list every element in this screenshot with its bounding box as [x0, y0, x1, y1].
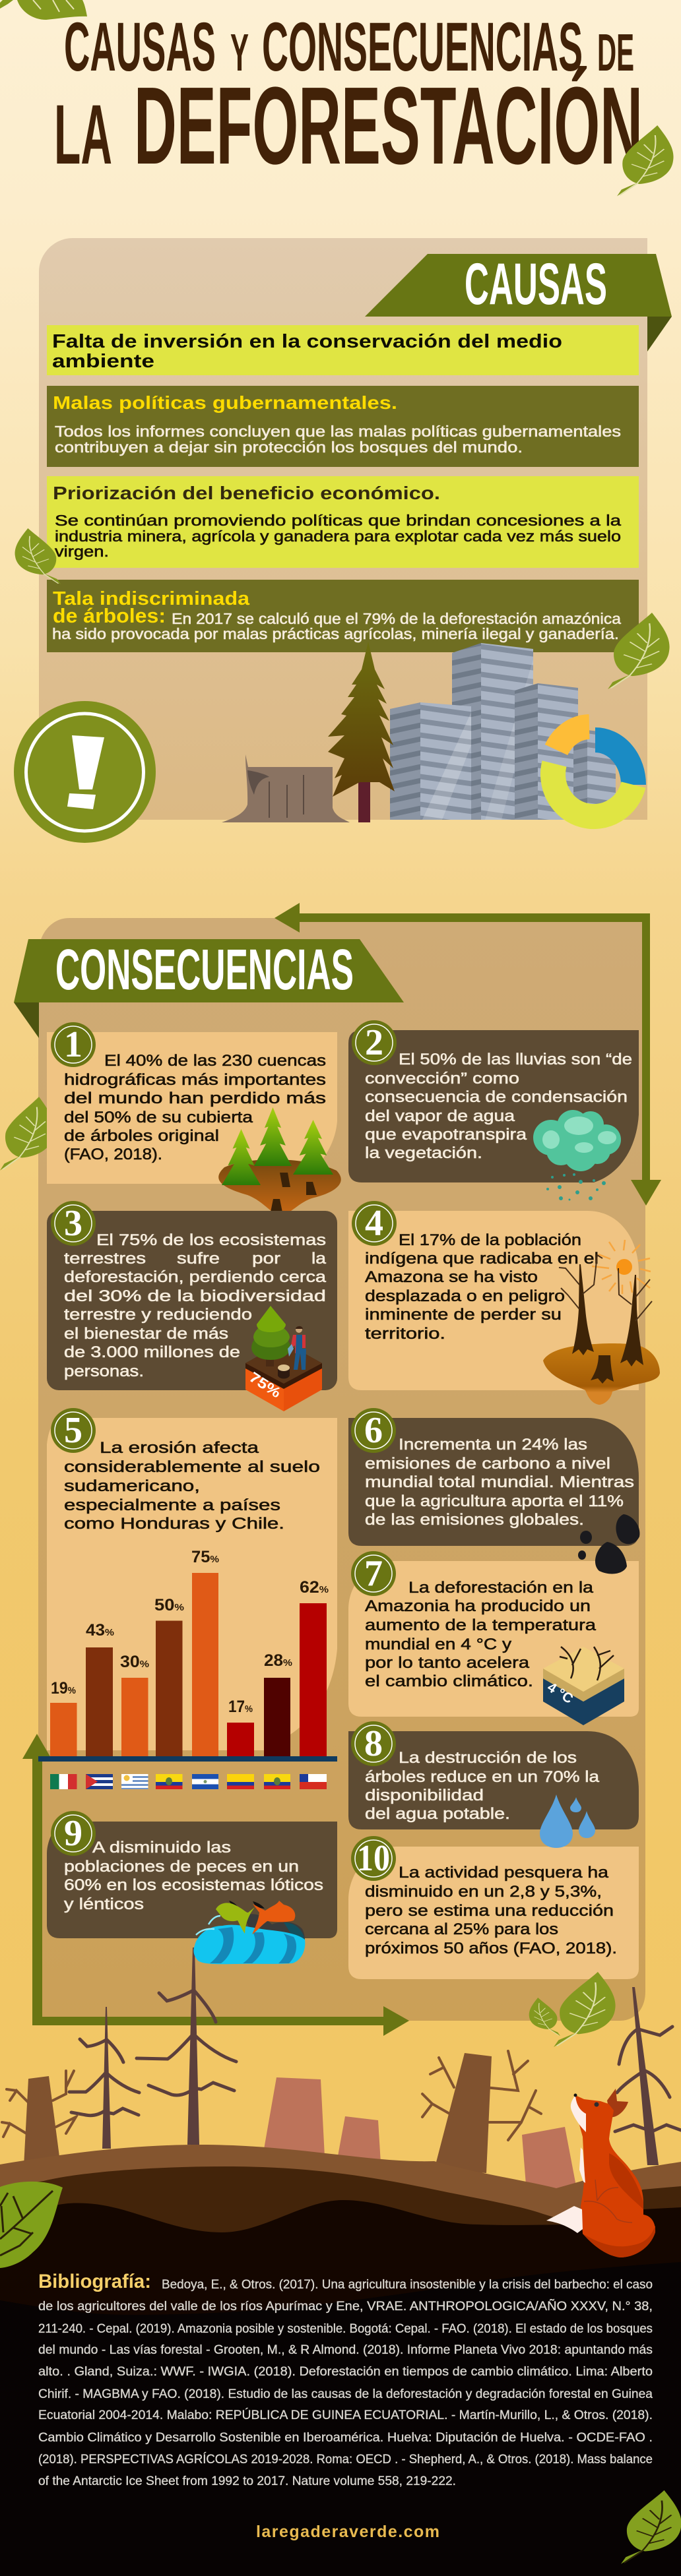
bar chart: erosion by country: 19%	[51, 1679, 76, 1698]
card 2: 2	[365, 1022, 383, 1063]
title: Y	[230, 23, 249, 82]
cause 3: priorización: virgen.	[55, 543, 109, 560]
ground: black soil	[0, 2200, 681, 2576]
card 3: terrestres	[64, 1250, 146, 1268]
card 3	[47, 1201, 337, 1390]
card 2: que evapotranspira	[365, 1126, 527, 1144]
card 7: mundial en 4 °C y	[365, 1636, 512, 1653]
cause 3: priorización: Se continúan promoviendo políticas que brindan concesiones a la	[55, 512, 621, 529]
cause 2: malas políticas: Todos los informes concluyen que las malas políticas gubernamentales	[55, 423, 621, 440]
card 9	[47, 1811, 337, 1938]
cause 1: falta de inversión: Falta de inversión en la conservación del medio	[52, 331, 562, 352]
bibliography: alto. . Gland, Suiza.: WWF. - IWGIA. (2018). Deforestación en tiempos de cambio climático. Lima: Alberto	[38, 2364, 653, 2379]
icon: person, tree and cube	[245, 1306, 322, 1411]
leaf: top left	[0, 0, 87, 20]
icon: person, tree and cube: 75%	[246, 1368, 284, 1401]
card 1: del 50% de su cubierta	[64, 1109, 253, 1126]
icon: water drops	[540, 1794, 595, 1848]
card 4	[348, 1201, 639, 1390]
card 6: de las emisiones globales.	[365, 1511, 584, 1529]
cause 2: malas políticas: Malas políticas gubernamentales.	[53, 392, 397, 413]
card 8: del agua potable.	[365, 1805, 510, 1823]
panel: causas	[39, 238, 647, 820]
bibliography: Bedoya, E., & Otros. (2017). Una agricultura insostenible y la crisis del barbecho: el caso	[162, 2277, 653, 2292]
arrow: left going up and bottom going right	[22, 1734, 409, 2036]
title: CAUSAS	[64, 9, 216, 86]
banner: consecuencias: CONSECUENCIAS	[55, 938, 354, 1002]
card 5: La erosión afecta	[100, 1439, 259, 1457]
title	[54, 9, 643, 187]
cause 4: tala: de árboles:	[53, 604, 166, 627]
icon: exclamation badge	[14, 701, 156, 843]
pink stumps	[263, 2077, 577, 2193]
bibliography: 211-240. - Cepal. (2019). Amazonia posible y sostenible. Bogotá: Cepal. - FAO. (2018). El estado de los bosques	[38, 2321, 653, 2336]
icon: stump	[222, 754, 350, 822]
card 1	[47, 1022, 337, 1184]
card 8: La destrucción de los	[399, 1749, 577, 1767]
cause 4: tala: En 2017 se calculó que el 79% de la deforestación amazónica	[172, 610, 621, 627]
bibliography: de los agricultores del valle de los ríos Apurímac y Ene, VRAE. ANTHROPOLOGICA/AÑO XXXV, N.° 38,	[38, 2298, 653, 2314]
card 10: 10	[357, 1838, 390, 1879]
bar chart: erosion by country: 17%	[228, 1698, 253, 1716]
leaf: causes left	[15, 528, 61, 584]
title: DE	[597, 23, 634, 82]
card 3: de 3.000 millones de	[64, 1343, 240, 1361]
card 6: 6	[364, 1410, 383, 1451]
flags row	[50, 1774, 327, 1789]
card 1: hidrográficas más importantes	[64, 1071, 326, 1089]
card 6: Incrementa un 24% las	[399, 1436, 587, 1454]
cause 1: falta de inversión: ambiente	[52, 351, 154, 372]
bibliography: del mundo - Las vías forestal - Grooten, M., & R Almond. (2018). Informe Planeta Vivo 2018: apuntando más	[38, 2343, 653, 2357]
icon: dry island with sun	[543, 1240, 660, 1405]
card 3: del 30% de la biodiversidad	[64, 1287, 326, 1305]
bar chart: erosion by country: 30%	[120, 1653, 149, 1671]
panel: consecuencias	[38, 918, 645, 2021]
card 10	[348, 1836, 639, 1979]
icon: buildings	[390, 643, 616, 820]
leaf: bottom right	[621, 2490, 681, 2564]
card 5: como Honduras y Chile.	[64, 1515, 284, 1533]
card 7: aumento de la temperatura	[365, 1616, 596, 1634]
card 8	[348, 1721, 639, 1829]
ground: deepest layer	[0, 2262, 681, 2576]
bibliography: Cambio Climático y Desarrollo Sostenible en Iberoamérica. Huelva: Diputación de Huelva. - OCDE-FAO .	[38, 2430, 653, 2445]
card 3: terrestre y reduciendo	[64, 1306, 252, 1324]
card 1: El 40% de las 230 cuencas	[104, 1052, 326, 1070]
cause 3: priorización	[47, 476, 639, 568]
card 1: del mundo han perdido más	[64, 1089, 326, 1107]
card 9: A disminuido las	[92, 1839, 231, 1856]
banner: causas	[365, 251, 672, 352]
cause 2: malas políticas	[47, 386, 639, 467]
card 5	[47, 1408, 337, 1750]
icon: fox	[546, 2089, 655, 2257]
cause 3: priorización: industria minera, agrícola y ganadera para explotar cada vez más suelo	[55, 528, 621, 545]
card 4: territorio.	[365, 1325, 445, 1343]
card 7	[348, 1551, 639, 1717]
card 10: cercana al 25% para los	[365, 1920, 558, 1938]
bibliography: of the Antarctic Ice Sheet from 1992 to 2017. Nature volume 558, 219-222.	[38, 2474, 456, 2488]
card 4: indígena que radicaba en el	[365, 1250, 599, 1268]
icon: fish and waves	[193, 1901, 305, 1964]
bar chart: erosion by country: 50%	[154, 1596, 184, 1614]
bar chart: erosion by country: 43%	[86, 1621, 114, 1640]
icon: dry soil cube 4 °C	[543, 1647, 624, 1725]
bar chart: erosion by country: 28%	[264, 1651, 292, 1670]
card 2: del vapor de agua	[365, 1107, 515, 1125]
bar chart: erosion by country: 75%	[191, 1548, 219, 1566]
card 3: sufre	[177, 1250, 220, 1268]
leaves: near bottom	[529, 1972, 616, 2047]
icon: island with trees	[218, 1107, 341, 1216]
bar chart: erosion by country	[38, 1548, 337, 1762]
card 6: que la agricultura aporta el 11%	[365, 1492, 624, 1510]
card 4: 4	[365, 1203, 383, 1244]
card 9: poblaciones de peces en un	[64, 1858, 299, 1876]
card 1: 1	[64, 1024, 82, 1065]
leaf: title right	[617, 125, 674, 197]
card 7: La deforestación en la	[408, 1579, 593, 1597]
bar chart: erosion by country: 62%	[300, 1578, 329, 1597]
card 8: disponibilidad	[365, 1787, 484, 1804]
card 4: Amazona se ha visto	[365, 1268, 538, 1286]
card 7: 7	[364, 1553, 383, 1594]
card 7: por lo tanto acelera	[365, 1654, 529, 1672]
bibliography: (2018). PERSPECTIVAS AGRÍCOLAS 2019-2028. Roma: OECD . - Shepherd, A., & Otros. (2018). Mass balance	[38, 2451, 653, 2467]
arrow: top to right	[275, 903, 661, 1206]
card 10: disminuido en un 2,8 y 5,3%,	[365, 1883, 602, 1901]
bibliography: Chirif. - MAGBMA y FAO. (2018). Estudio de las causas de la deforestación y degradación forestal en Guinea	[38, 2387, 653, 2401]
banner: consecuencias	[14, 938, 404, 1038]
card 10: próximos 50 años (FAO, 2018).	[365, 1940, 617, 1957]
dead pine trees	[69, 1947, 681, 2165]
leaf: bottom left	[0, 2182, 63, 2268]
cause 4: tala	[47, 580, 639, 652]
card 8: árboles reduce en un 70% la	[365, 1768, 599, 1786]
cause 1: falta de inversión	[47, 325, 639, 375]
card 4: desplazada o en peligro	[365, 1287, 565, 1305]
card 3: deforestación, perdiendo cerca	[64, 1268, 326, 1286]
cause 4: tala: ha sido provocada por malas prácticas agrícolas, minería ilegal y ganadería.	[52, 625, 619, 642]
card 2: consecuencia de condensación	[365, 1088, 628, 1106]
card 3: El 75% de los ecosistemas	[96, 1231, 326, 1249]
title: LA	[54, 88, 112, 182]
card 4: inminente de perder su	[365, 1306, 562, 1324]
bibliography: Bibliografía:	[38, 2271, 151, 2292]
icon: rain cloud	[533, 1110, 621, 1200]
card 3: por	[252, 1250, 280, 1268]
bibliography	[38, 2271, 653, 2488]
card 6: emisiones de carbono a nivel	[365, 1455, 610, 1473]
card 9: 60% en los ecosistemas lóticos	[64, 1876, 323, 1894]
icon: dry soil cube 4 °C: 4 °C	[544, 1680, 575, 1707]
card 9: 9	[64, 1813, 82, 1854]
card 2	[348, 1020, 639, 1182]
card 3: la	[311, 1250, 326, 1268]
leaf: causes right	[608, 613, 670, 689]
cause 2: malas políticas: contribuyen a dejar sin protección los bosques del mundo.	[55, 439, 523, 456]
card 8: 8	[364, 1723, 383, 1764]
card 10: pero se estima una reducción	[365, 1902, 614, 1920]
card 4: El 17% de la población	[399, 1231, 581, 1249]
website: laregaderaverde.com	[256, 2523, 439, 2541]
card 6	[348, 1408, 639, 1546]
card 2: convección” como	[365, 1070, 519, 1088]
cause 4: tala: Tala indiscriminada	[53, 588, 250, 609]
card 5: 5	[64, 1410, 82, 1451]
card 9: y lénticos	[64, 1895, 144, 1913]
icon: donut chart	[553, 727, 633, 816]
card 10: La actividad pesquera ha	[399, 1864, 608, 1882]
card 2: la vegetación.	[365, 1144, 482, 1162]
brown cut trees	[2, 2051, 541, 2173]
card 3: personas.	[64, 1363, 144, 1380]
leaf: consequences left	[0, 1097, 55, 1171]
card 1: de árboles original	[64, 1127, 219, 1145]
bibliography: Ecuatorial 2004-2014. Malabo: REPÚBLICA DE GUINEA ECUATORIAL. - Martín-Murillo, L., & Otros. (2018).	[38, 2407, 653, 2422]
card 3: 3	[64, 1203, 82, 1244]
card 6: mundial total mundial. Mientras	[365, 1473, 634, 1491]
ground: dark soil	[0, 2166, 681, 2576]
card 5: sudamericano,	[64, 1477, 200, 1495]
icon: coal rocks	[578, 1514, 639, 1574]
cause 3: priorización: Priorización del beneficio económico.	[53, 483, 440, 503]
card 3: el bienestar de más	[64, 1325, 228, 1343]
card 7: Amazonia ha producido un	[365, 1597, 591, 1615]
card 2: El 50% de las lluvias son “de	[399, 1051, 632, 1068]
icon: pine tree	[328, 642, 395, 822]
card 7: el cambio climático.	[365, 1672, 533, 1690]
card 5: considerablemente al suelo	[64, 1458, 320, 1476]
card 5: especialmente a países	[64, 1496, 280, 1514]
card 1: (FAO, 2018).	[64, 1146, 162, 1163]
ground: brown hill	[0, 2145, 681, 2576]
